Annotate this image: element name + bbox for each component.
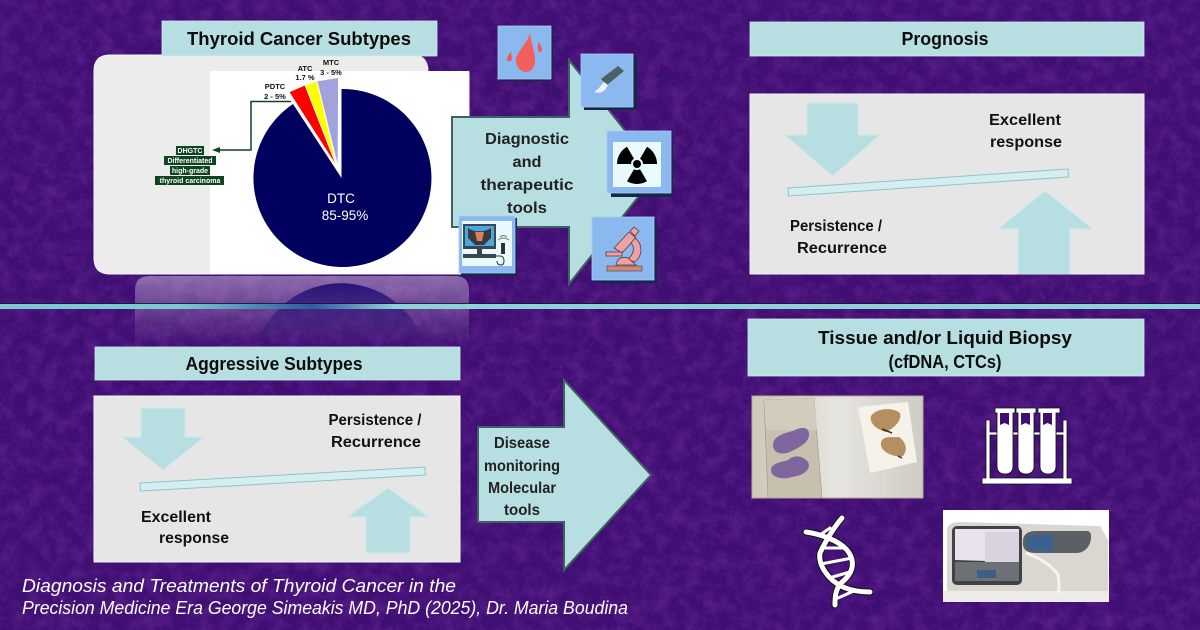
heading: aggressive subtypes: Aggressive Subtypes <box>186 353 362 374</box>
arrow: down <box>122 408 204 470</box>
pie label: PDTC: PDTC <box>265 82 286 91</box>
callout label: DHGTC <box>155 146 224 185</box>
icon: blood drop <box>498 26 553 81</box>
arrow: down <box>785 103 880 176</box>
panel: thyroid cancer subtypes <box>94 55 469 274</box>
heading: prognosis: Prognosis <box>902 28 988 49</box>
callout label: DHGTC: DHGTC <box>178 148 202 155</box>
image: tissue slides <box>752 396 923 498</box>
arrow: disease monitoring molecular tools: Disease <box>494 435 550 452</box>
icon: ultrasound <box>459 216 517 276</box>
pie label: MTC: MTC <box>323 58 340 67</box>
citation: Precision Medicine Era George Simeakis MD, PhD (2025), Dr. Maria Boudina <box>22 598 628 618</box>
arrow: disease monitoring molecular tools: monitoring <box>484 458 560 475</box>
arrow: disease monitoring molecular tools <box>478 380 651 570</box>
icon: microscope <box>592 217 657 283</box>
divider <box>0 303 1200 309</box>
label: excellent response: Excellent <box>989 112 1062 129</box>
label: excellent response: response <box>159 530 229 547</box>
label: excellent response: Excellent <box>141 509 212 526</box>
label: persistence / recurrence: Recurrence <box>331 434 421 451</box>
arrow: up <box>347 488 429 553</box>
heading: tissue and/or liquid biopsy: (cfDNA, CTCs) <box>888 351 1002 372</box>
pie chart <box>253 58 431 267</box>
citation <box>22 576 628 618</box>
label: persistence / recurrence: Persistence / <box>328 412 422 429</box>
pie label: ATC share: 1.7 % <box>295 73 315 82</box>
panel background <box>94 55 469 274</box>
heading: thyroid cancer subtypes: Thyroid Cancer Subtypes <box>187 28 411 49</box>
heading: tissue and/or liquid biopsy: Tissue and/or Liquid Biopsy <box>818 327 1073 348</box>
label: persistence / recurrence: Recurrence <box>797 240 887 257</box>
panel: prognosis <box>750 94 1144 274</box>
arrow: diagnostic and therapeutic tools: tools <box>507 200 547 217</box>
label: excellent response <box>989 112 1062 151</box>
callout label: DHGTC: high-grade <box>172 168 208 175</box>
icon: radiation <box>607 131 673 197</box>
label: persistence / recurrence: Persistence / <box>790 218 883 235</box>
image: sequencing instrument <box>943 510 1109 602</box>
arrow: disease monitoring molecular tools: tools <box>504 502 540 519</box>
arrow: diagnostic and therapeutic tools <box>452 60 658 284</box>
pie label: DTC share: 85-95% <box>322 208 368 223</box>
arrow: diagnostic and therapeutic tools: and <box>512 154 542 171</box>
chart reflection <box>135 276 469 345</box>
callout label: DHGTC: thyroid carcinoma <box>160 178 220 185</box>
heading: thyroid cancer subtypes <box>162 21 437 56</box>
citation: Diagnosis and Treatments of Thyroid Cancer in the <box>22 576 456 596</box>
label: excellent response: response <box>990 134 1062 151</box>
pie label: MTC share: 3 - 5% <box>320 68 342 77</box>
slanted balance bar <box>140 467 426 491</box>
icon: DNA helix <box>806 518 870 605</box>
label: excellent response <box>141 509 229 547</box>
arrow: diagnostic and therapeutic tools: Diagnostic <box>485 131 569 148</box>
pie label: ATC: ATC <box>298 64 313 73</box>
heading: aggressive subtypes <box>95 347 460 380</box>
pie label: DTC: DTC <box>327 191 355 206</box>
icon: test tubes <box>982 408 1072 484</box>
panel: aggressive subtypes <box>94 396 460 562</box>
label: persistence / recurrence <box>328 412 422 451</box>
heading: prognosis <box>750 22 1144 56</box>
pie label: PDTC share: 2 - 5% <box>264 92 286 101</box>
callout arrow: DHGTC <box>212 102 291 153</box>
icon: scalpel <box>581 54 637 110</box>
heading: tissue and/or liquid biopsy <box>748 319 1144 376</box>
label: persistence / recurrence <box>790 218 887 257</box>
chart white area <box>210 71 469 274</box>
slanted balance bar <box>788 169 1068 196</box>
callout label: DHGTC: Differentiated <box>167 158 213 165</box>
arrow: diagnostic and therapeutic tools: therapeutic <box>480 177 574 194</box>
arrow: up <box>998 191 1093 274</box>
arrow: disease monitoring molecular tools: Molecular <box>488 480 556 497</box>
